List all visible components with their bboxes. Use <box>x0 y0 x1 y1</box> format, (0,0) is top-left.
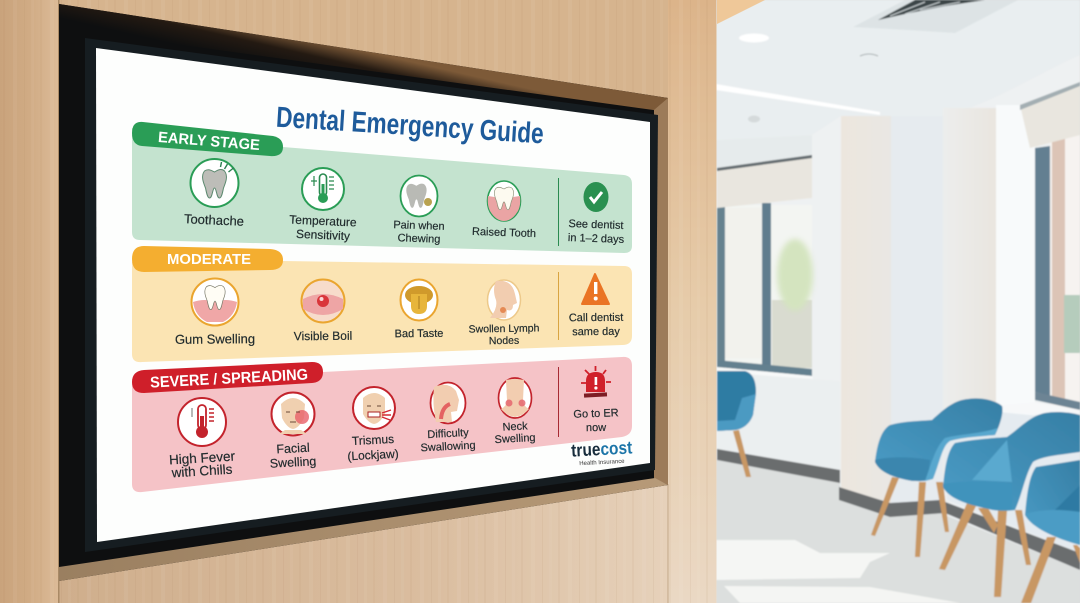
label: call dentist: Call dentist <box>569 312 623 324</box>
label: high fever: High Fever <box>169 448 236 468</box>
heading pill: moderate: MODERATE <box>167 251 251 268</box>
label: go to ER: Go to ER <box>573 407 619 421</box>
heading pill: moderate <box>132 246 283 272</box>
label: pain when chewing: Pain when <box>393 219 445 233</box>
display recess <box>59 4 668 581</box>
label: high fever: with Chills <box>170 462 233 480</box>
left window <box>717 155 814 381</box>
chair front <box>1021 460 1080 603</box>
label: facial swelling: Swelling <box>269 454 317 471</box>
label: temperature sensitivity: Temperature <box>289 213 357 229</box>
title: Dental Emergency Guide <box>275 102 545 150</box>
label: swollen lymph nodes: Nodes <box>489 335 519 347</box>
floor <box>716 460 1080 603</box>
label: bad taste: Bad Taste <box>395 328 443 340</box>
heading pill: severe: SEVERE / SPREADING <box>150 366 308 392</box>
icon: facial swelling <box>272 392 314 436</box>
label: temperature sensitivity <box>289 213 357 243</box>
label: trismus: Trismus <box>352 432 394 448</box>
waiting room background <box>716 0 1080 603</box>
icon: gum swelling <box>192 278 238 326</box>
recess upper shadow <box>59 4 668 112</box>
chair centre <box>871 398 1003 557</box>
icon: toothache <box>190 159 238 207</box>
label: raised tooth: Raised Tooth <box>472 226 536 240</box>
label: call dentist: same day <box>572 326 620 338</box>
icon: pain when chewing <box>400 176 438 216</box>
label: difficulty swallowing: Difficulty <box>427 427 470 441</box>
ceiling <box>716 0 1080 140</box>
label: high fever <box>169 448 236 480</box>
recess right wall <box>654 98 668 485</box>
wall below left window <box>717 372 840 470</box>
label: toothache: Toothache <box>184 211 244 229</box>
back wall beside window <box>812 135 841 480</box>
panel: moderate <box>132 246 632 362</box>
label: swollen lymph nodes <box>469 322 540 347</box>
icon: temperature sensitivity <box>302 168 344 210</box>
label: see dentist: in 1–2 days <box>568 232 625 246</box>
column <box>841 105 1035 506</box>
ceiling downlight <box>739 34 769 42</box>
label: see dentist <box>568 218 625 246</box>
icon: neck swelling <box>498 378 532 418</box>
ceiling light strip <box>716 84 880 115</box>
label: neck swelling <box>494 420 536 446</box>
icon: warning triangle <box>582 274 609 304</box>
logo: truecost: truecost <box>571 437 633 461</box>
label: neck swelling: Swelling <box>494 432 536 446</box>
icon: raised tooth <box>488 181 520 221</box>
heading pill: early stage <box>132 122 283 156</box>
chair far left <box>717 371 756 477</box>
right window <box>1002 82 1080 418</box>
recess sill <box>59 478 668 581</box>
label: call dentist <box>569 312 623 338</box>
label: pain when chewing <box>393 219 445 246</box>
wood: upper panel <box>59 0 668 120</box>
ceiling vent <box>853 0 1018 33</box>
icon: swollen lymph nodes <box>488 280 520 320</box>
chair middle <box>939 412 1080 597</box>
label: trismus: (Lockjaw) <box>347 447 399 463</box>
label: pain when chewing: Chewing <box>397 232 441 246</box>
label: neck swelling: Neck <box>502 420 528 434</box>
icon: visible boil <box>302 280 344 322</box>
logo: truecost: Health Insurance <box>579 459 625 467</box>
label: temperature sensitivity: Sensitivity <box>296 227 350 243</box>
icon: trismus <box>353 387 395 429</box>
heading pill: early stage: EARLY STAGE <box>157 129 260 154</box>
label: trismus <box>347 432 399 463</box>
wall below right sill <box>943 412 1080 553</box>
wood wall <box>0 0 765 603</box>
icon: difficulty swallowing <box>430 382 466 424</box>
panel: early stage <box>132 122 632 253</box>
label: facial swelling: Facial <box>276 441 310 456</box>
label: go to ER <box>573 407 619 434</box>
icon: bad taste <box>400 280 438 320</box>
panel: severe <box>132 357 632 492</box>
label: swollen lymph nodes: Swollen Lymph <box>469 322 540 336</box>
icon: emergency siren <box>581 366 611 398</box>
label: gum swelling: Gum Swelling <box>175 331 255 347</box>
baseboards <box>717 449 1080 570</box>
icon: check <box>584 182 608 212</box>
label: difficulty swallowing <box>420 427 476 454</box>
label: go to ER: now <box>586 422 606 434</box>
icon: high fever <box>178 398 226 446</box>
label: visible boil: Visible Boil <box>294 329 352 343</box>
label: facial swelling <box>269 441 317 471</box>
label: difficulty swallowing: Swallowing <box>420 440 476 454</box>
screen bezel <box>85 38 658 552</box>
floor sunlight <box>716 540 960 603</box>
label: see dentist: See dentist <box>568 218 624 232</box>
infographic screen <box>96 48 650 542</box>
